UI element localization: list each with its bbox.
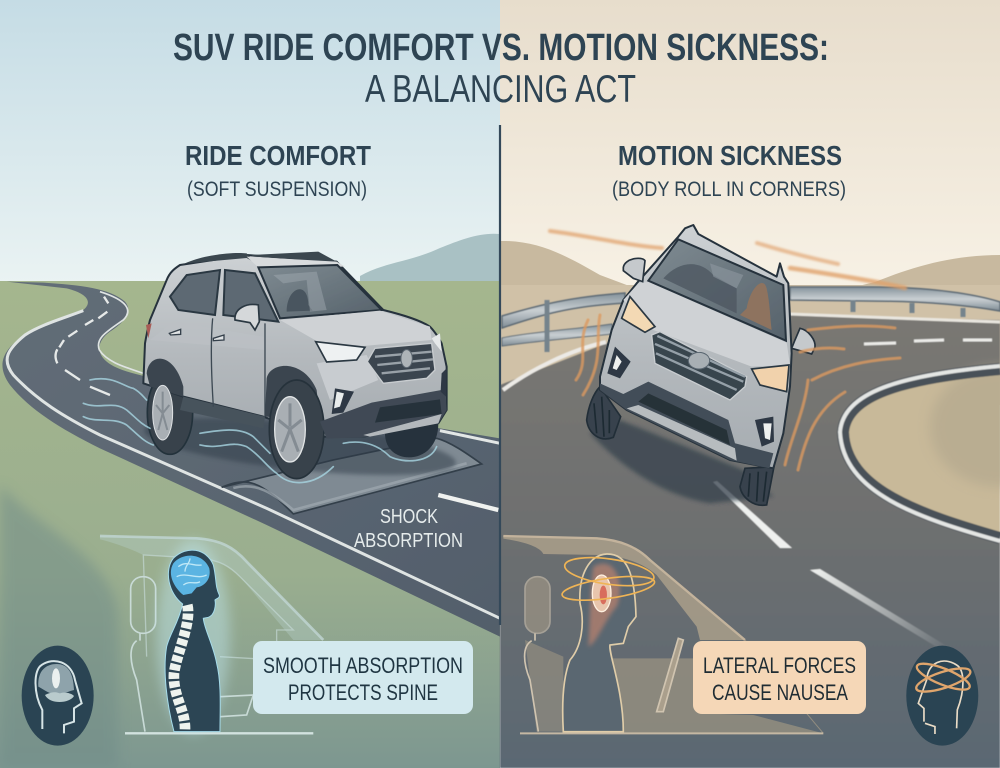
callout: lateral forces: CAUSE NAUSEA xyxy=(712,680,848,705)
panel: motion sickness background xyxy=(500,0,1000,405)
illustration: seated passenger with inner ear disturbance xyxy=(503,536,823,733)
icon: speed bump xyxy=(222,438,482,514)
illustration: SUV on soft suspension xyxy=(143,252,447,479)
illustration: seated passenger with protected spine xyxy=(100,536,323,733)
label: shock absorption: ABSORPTION xyxy=(354,530,463,552)
heading: ride comfort: RIDE COMFORT xyxy=(185,140,371,171)
icon: left suv shadow xyxy=(142,407,458,486)
label: shock absorption: SHOCK xyxy=(380,506,439,528)
heading: motion sickness: MOTION SICKNESS xyxy=(618,140,842,171)
icon: dizzy head badge xyxy=(906,646,978,746)
callout: smooth absorption: SMOOTH ABSORPTION xyxy=(263,653,463,678)
divider: centre line xyxy=(499,125,501,625)
icon: guardrail xyxy=(502,287,1000,352)
callout: lateral forces xyxy=(693,641,866,714)
heading: ride comfort: (SOFT SUSPENSION) xyxy=(187,178,367,201)
label: shock absorption xyxy=(354,506,463,552)
panel: ride comfort background xyxy=(0,0,500,768)
callout: lateral forces: LATERAL FORCES xyxy=(703,653,856,678)
heading: motion sickness xyxy=(612,140,846,201)
callout: smooth absorption xyxy=(253,641,473,714)
heading: ride comfort xyxy=(185,140,371,201)
icon: motion streaks behind suv xyxy=(550,231,905,288)
icon: lateral force lines xyxy=(576,315,900,470)
heading: motion sickness: (BODY ROLL IN CORNERS) xyxy=(612,178,846,201)
callout: smooth absorption: PROTECTS SPINE xyxy=(288,680,438,705)
road: winding left road xyxy=(2,282,500,637)
title: SUV RIDE COMFORT VS. MOTION SICKNESS: xyxy=(173,27,829,69)
title xyxy=(173,27,829,111)
icon: balanced head badge xyxy=(22,646,94,746)
title: A BALANCING ACT xyxy=(365,68,636,111)
icon: suspension shock waves xyxy=(83,379,437,483)
road: curving right road xyxy=(500,314,1000,768)
illustration: SUV leaning in a corner xyxy=(587,225,815,505)
